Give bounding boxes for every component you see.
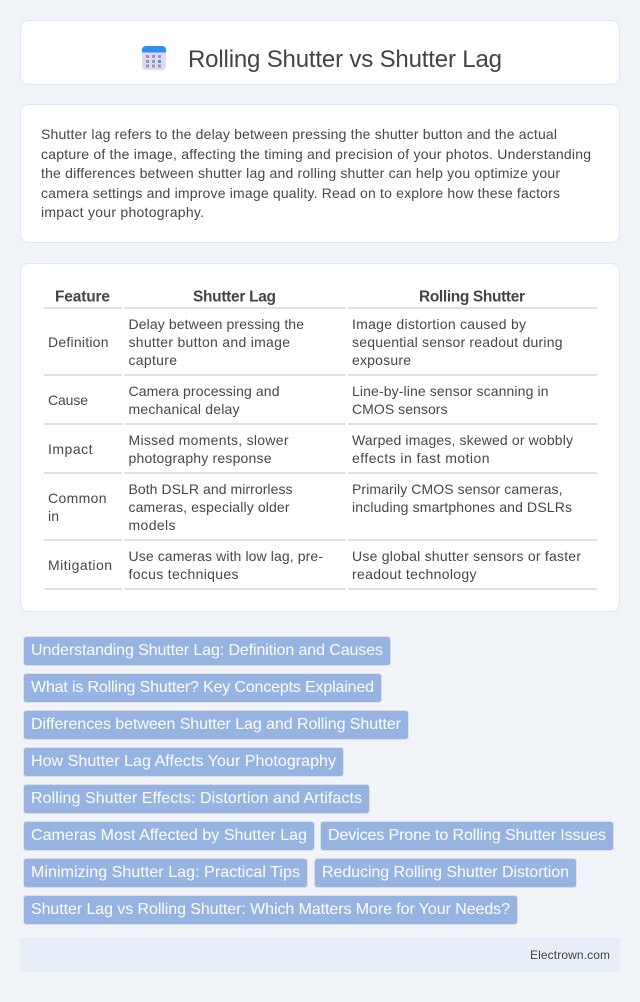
row: definition: shutter button and image <box>128 334 290 350</box>
intro text: camera settings and improve image quality. Read on to explore how these factors <box>41 185 560 201</box>
row: definition: sequential sensor readout during <box>352 334 562 350</box>
title card <box>20 20 620 84</box>
row: common in: Common <box>48 490 106 506</box>
row: impact: Impact <box>48 441 93 457</box>
row: definition: Image distortion caused by <box>352 316 526 332</box>
row: common in: Both DSLR and mirrorless <box>128 481 292 497</box>
intro text: impact your photography. <box>41 204 204 220</box>
topic chip <box>314 858 576 888</box>
row: mitigation: Use cameras with low lag, pre- <box>128 548 323 564</box>
row: cause: CMOS sensors <box>352 401 448 417</box>
row: impact: Missed moments, slower <box>128 432 289 448</box>
intro text: capture of the image, affecting the timing and precision of your photos. Understanding <box>41 146 591 162</box>
row: impact: Warped images, skewed or wobbly <box>352 432 573 448</box>
table header <box>55 288 525 306</box>
footer <box>20 938 620 972</box>
intro text: Shutter lag refers to the delay between pressing the shutter button and the actual <box>41 126 557 142</box>
topic chip: Differences between Shutter Lag and Rolling Shutter <box>31 716 402 733</box>
row: impact: photography response <box>128 450 272 466</box>
row: impact: effects in fast motion <box>352 450 490 466</box>
row: mitigation: Mitigation <box>48 557 112 573</box>
title: Rolling Shutter vs Shutter Lag <box>188 46 502 73</box>
row: definition: Delay between pressing the <box>128 316 304 332</box>
topic chip <box>320 822 614 850</box>
topic chip: Understanding Shutter Lag: Definition and Causes <box>31 642 383 659</box>
row: impact <box>48 432 573 466</box>
topic chip <box>24 822 314 850</box>
topic chip: Cameras Most Affected by Shutter Lag <box>31 827 307 844</box>
topic chip <box>24 784 370 814</box>
row: definition: capture <box>128 352 177 368</box>
row: common in: models <box>128 517 176 533</box>
row: definition <box>48 316 562 368</box>
intro card <box>20 104 620 242</box>
row: cause: Line-by-line sensor scanning in <box>352 383 548 399</box>
topic chip: What is Rolling Shutter? Key Concepts Explained <box>31 679 374 696</box>
topic chip: Rolling Shutter Effects: Distortion and Artifacts <box>31 790 362 807</box>
topic chip <box>24 636 390 666</box>
table header: Rolling Shutter <box>419 288 525 306</box>
topic chip <box>24 748 344 776</box>
topic chip: Reducing Rolling Shutter Distortion <box>322 864 569 881</box>
icon: calendar <box>142 46 166 70</box>
row: common in: Primarily CMOS sensor cameras, <box>352 481 562 497</box>
topic chip: Minimizing Shutter Lag: Practical Tips <box>31 864 300 881</box>
table header: Feature <box>55 288 110 306</box>
footer brand: Electrown.com <box>530 948 610 962</box>
row: cause: Cause <box>48 392 88 408</box>
intro text <box>41 126 591 220</box>
row: common in <box>48 481 572 533</box>
row: mitigation: readout technology <box>352 566 476 582</box>
topic chip: Devices Prone to Rolling Shutter Issues <box>328 827 606 844</box>
row: mitigation <box>48 548 581 582</box>
intro text: the differences between shutter lag and rolling shutter can help you optimize your <box>41 165 560 181</box>
topic chip: Shutter Lag vs Rolling Shutter: Which Matters More for Your Needs? <box>31 901 510 918</box>
table header: Shutter Lag <box>193 288 276 306</box>
topic chip <box>24 858 308 888</box>
row: common in: cameras, especially older <box>128 499 290 515</box>
topic chip <box>24 710 408 740</box>
row: common in: including smartphones and DSLRs <box>352 499 572 515</box>
topic chip <box>24 674 382 702</box>
comparison table card <box>20 264 620 612</box>
row: cause: Camera processing and <box>128 383 280 399</box>
row: mitigation: focus techniques <box>128 566 238 582</box>
row: cause: mechanical delay <box>128 401 240 417</box>
row: cause <box>48 383 548 417</box>
row: common in: in <box>48 508 59 524</box>
topic chip: How Shutter Lag Affects Your Photography <box>31 753 336 770</box>
row: definition: exposure <box>352 352 411 368</box>
row: definition: Definition <box>48 334 108 350</box>
row: mitigation: Use global shutter sensors or faster <box>352 548 581 564</box>
topic chip <box>24 896 518 924</box>
